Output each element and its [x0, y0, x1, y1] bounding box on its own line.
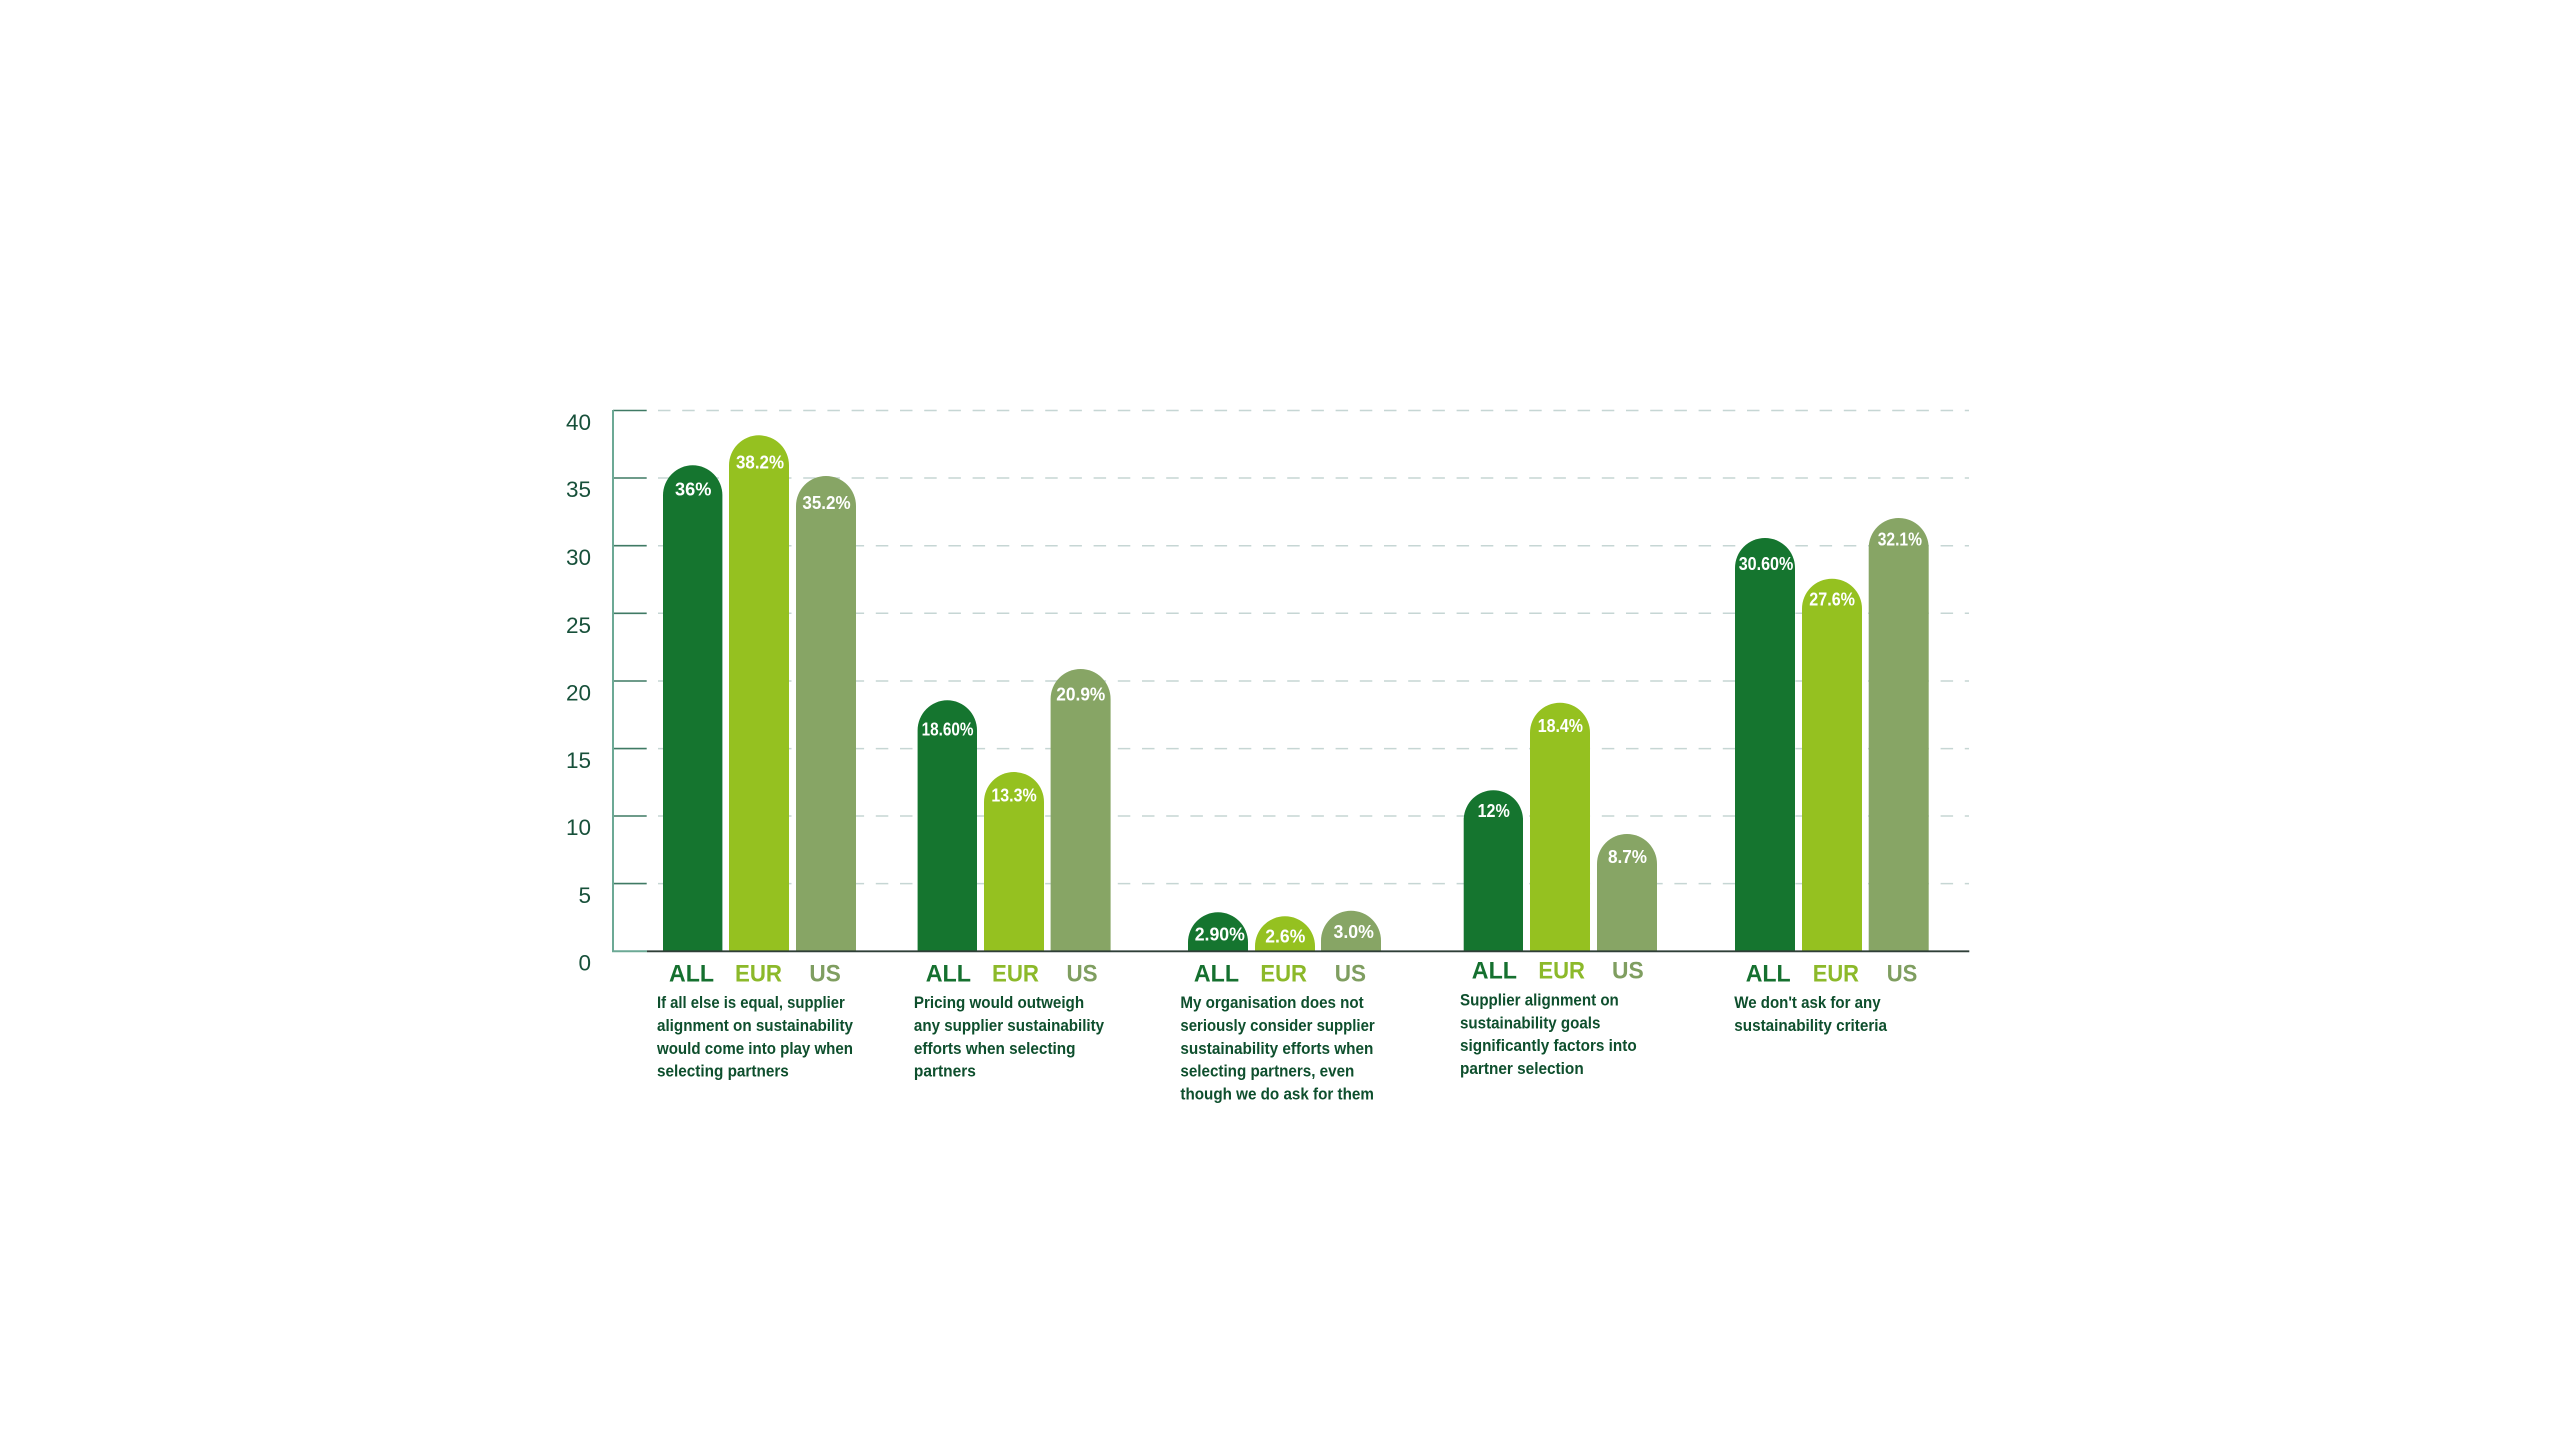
bar: EUR 27.6%: 27.6%: [1809, 590, 1855, 610]
description: sustainability goals: [1460, 1013, 1600, 1032]
bar: ALL 36%: 36%: [675, 480, 711, 500]
bar: EUR 38.2%: [729, 435, 789, 951]
bar: US 32.1%: 32.1%: [1878, 530, 1922, 550]
y axis with ticks and labels: 30: [566, 545, 591, 570]
description: sustainability criteria: [1734, 1016, 1887, 1035]
bar: ALL 12%: [1464, 790, 1523, 951]
category labels: ALL: [926, 960, 971, 988]
category labels: [669, 960, 841, 988]
bar: US 3.0%: 3.0%: [1334, 922, 1374, 942]
bar: EUR 13.3%: [984, 772, 1044, 951]
y axis with ticks and labels: 20: [566, 680, 591, 706]
bar: US 8.7%: 8.7%: [1608, 847, 1647, 867]
bar: US 3.0%: [1321, 911, 1381, 951]
description: Pricing would outweigh: [914, 993, 1084, 1012]
description: selecting partners: [657, 1062, 789, 1081]
category labels: US: [1887, 960, 1917, 988]
bar: ALL 18.60%: [918, 700, 977, 951]
description: [1180, 993, 1375, 1104]
group 5: no sustainability criteria: [1734, 518, 1929, 1035]
description: alignment on sustainability: [657, 1016, 853, 1035]
category labels: ALL: [669, 960, 714, 988]
bar: ALL 36%: [663, 465, 722, 951]
description: would come into play when: [656, 1039, 853, 1058]
bar: ALL 2.90%: 2.90%: [1195, 924, 1245, 944]
description: We don't ask for any: [1734, 993, 1881, 1012]
description: any supplier sustainability: [914, 1016, 1105, 1035]
group 1: if all else is equal: [656, 435, 856, 1081]
bar: ALL 30.60%: [1735, 538, 1795, 951]
description: seriously consider supplier: [1180, 1016, 1375, 1035]
group 3: does not seriously consider: [1180, 911, 1381, 1104]
category labels: US: [809, 960, 841, 988]
y axis with ticks and labels: 5: [578, 883, 591, 908]
description: My organisation does not: [1180, 993, 1364, 1012]
description: If all else is equal, supplier: [657, 993, 845, 1012]
y axis with ticks and labels: 0: [578, 950, 591, 976]
bar: EUR 2.6%: [1255, 916, 1315, 951]
description: [1734, 993, 1887, 1035]
y axis with ticks and labels: 40: [566, 410, 591, 435]
category labels: EUR: [1813, 960, 1859, 988]
category labels: US: [1612, 958, 1644, 984]
bar: EUR 27.6%: [1802, 579, 1862, 951]
bar: US 32.1%: [1869, 518, 1929, 951]
y axis with ticks and labels: 15: [566, 748, 591, 773]
bar: ALL 18.60%: 18.60%: [922, 720, 974, 740]
bar: EUR 18.4%: [1530, 703, 1590, 951]
bar: EUR 18.4%: 18.4%: [1538, 716, 1583, 736]
description: Supplier alignment on: [1460, 990, 1619, 1010]
category labels: ALL: [1746, 960, 1791, 988]
category labels: EUR: [735, 960, 782, 988]
bar: US 35.2%: 35.2%: [802, 493, 851, 513]
description: partner selection: [1460, 1059, 1584, 1078]
bar: US 8.7%: [1597, 834, 1657, 951]
bar: US 20.9%: 20.9%: [1056, 685, 1105, 705]
bar: US 20.9%: [1051, 669, 1111, 951]
description: [1460, 990, 1637, 1078]
bar: ALL 12%: 12%: [1478, 801, 1510, 821]
y axis with ticks and labels: 35: [566, 477, 591, 502]
category labels: [1746, 960, 1917, 988]
category labels: US: [1066, 960, 1098, 988]
category labels: ALL: [1194, 960, 1239, 988]
bar: EUR 2.6%: 2.6%: [1265, 926, 1305, 946]
bar: ALL 30.60%: 30.60%: [1739, 554, 1793, 574]
category labels: US: [1335, 960, 1366, 988]
category labels: EUR: [992, 960, 1039, 988]
group 2: pricing would outweigh: [914, 669, 1111, 1081]
bar: EUR 13.3%: 13.3%: [991, 785, 1037, 805]
category labels: [1472, 958, 1644, 984]
category labels: [1194, 960, 1366, 988]
description: partners: [914, 1062, 976, 1081]
description: significantly factors into: [1460, 1036, 1637, 1055]
category labels: [926, 960, 1098, 988]
category labels: EUR: [1260, 960, 1307, 988]
y axis with ticks and labels: 25: [566, 613, 591, 638]
bar: ALL 2.90%: [1188, 912, 1248, 951]
description: though we do ask for them: [1180, 1084, 1374, 1104]
bar: EUR 38.2%: 38.2%: [736, 452, 784, 472]
y axis with ticks and labels: [566, 410, 647, 976]
description: [656, 993, 853, 1081]
description: efforts when selecting: [914, 1039, 1076, 1058]
y axis with ticks and labels: 10: [566, 815, 591, 840]
bar: US 35.2%: [796, 476, 856, 951]
description: selecting partners, even: [1180, 1062, 1354, 1081]
category labels: ALL: [1472, 958, 1517, 984]
description: [914, 993, 1105, 1081]
description: sustainability efforts when: [1180, 1039, 1373, 1058]
category labels: EUR: [1538, 958, 1585, 984]
group 4: supplier alignment on goals: [1460, 703, 1657, 1078]
